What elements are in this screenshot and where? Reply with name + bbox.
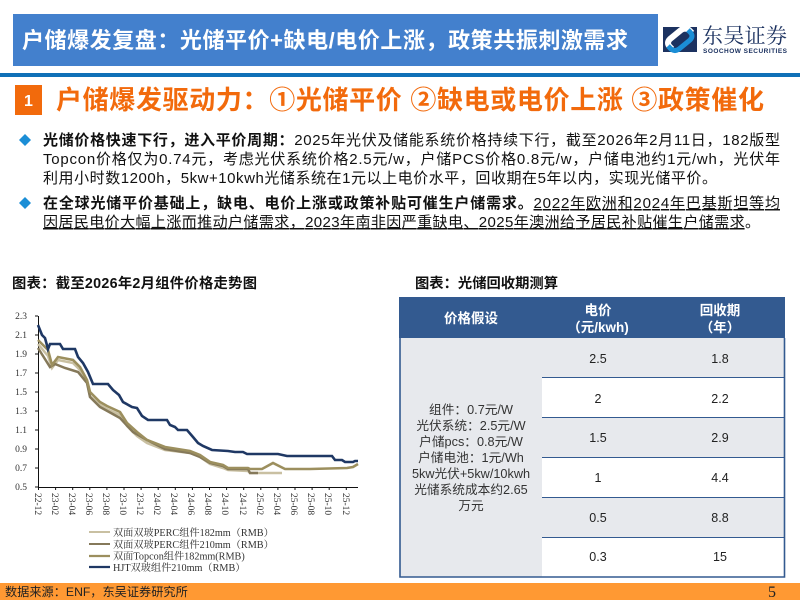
y axis labels: 1.3 bbox=[15, 407, 27, 417]
table header: 价格假设 bbox=[444, 310, 498, 326]
table values: 4.4 bbox=[711, 471, 729, 485]
x axis labels: 23-08 bbox=[100, 493, 110, 515]
logo: Soochow Securities bbox=[663, 20, 788, 55]
assumptions cell: 户储电池：1元/Wh bbox=[418, 450, 524, 465]
x axis labels: 25-04 bbox=[271, 493, 281, 515]
table values: 8.8 bbox=[711, 511, 729, 525]
bullet paragraph: demand catalysts: 因居民电价大幅上涨而推动户储需求，2023年南非因严重缺电、2025年澳洲给予居民补贴催生户储需求。 bbox=[43, 214, 760, 231]
y axis labels: 1.9 bbox=[15, 350, 27, 360]
series: HJT 210mm bbox=[38, 325, 358, 462]
icon: bullet diamond 1 bbox=[19, 134, 31, 146]
table values: 15 bbox=[713, 550, 727, 564]
legend: 双面Topcon组件182mm(RMB) bbox=[113, 550, 245, 562]
table values: 1.8 bbox=[711, 352, 729, 366]
table header: （元/kwh) bbox=[567, 320, 629, 335]
table header: （年） bbox=[700, 319, 740, 335]
x axis labels: 25-12 bbox=[340, 493, 350, 515]
assumptions cell: 光储系统成本约2.65 bbox=[414, 483, 528, 497]
footer bar: 数据来源：ENF，东吴证券研究所 bbox=[5, 584, 188, 599]
legend: 双面双玻PERC组件210mm（RMB） bbox=[113, 538, 274, 551]
assumptions cell: 5kw光伏+5kw/10kwh bbox=[412, 467, 530, 481]
assumptions cell bbox=[412, 403, 530, 513]
x axis labels: 24-10 bbox=[219, 493, 229, 515]
table header: 电价 bbox=[584, 303, 612, 318]
x axis labels: 25-08 bbox=[305, 493, 315, 515]
legend bbox=[89, 526, 274, 574]
x axis labels: 25-10 bbox=[322, 493, 332, 515]
y axis labels: 0.5 bbox=[15, 483, 27, 493]
chart title: module price: 图表：截至2026年2月组件价格走势图 bbox=[12, 274, 257, 292]
table body bbox=[400, 338, 542, 577]
table values bbox=[589, 352, 729, 564]
x axis labels: 22-12 bbox=[32, 493, 42, 515]
assumptions cell: 户储pcs：0.8元/W bbox=[419, 434, 523, 449]
footer bar bbox=[0, 583, 800, 600]
table values: 2.9 bbox=[711, 431, 729, 445]
logo: Soochow Securities: SOOCHOW SECURITIES bbox=[703, 48, 788, 55]
x axis labels: 23-06 bbox=[83, 493, 93, 515]
logo: Soochow Securities: 东吴证券 bbox=[702, 20, 787, 50]
series: PERC 210mm bbox=[38, 348, 258, 473]
bullet paragraph: demand catalysts: 在全球光储平价基础上，缺电、电价上涨或政策补贴可催生户储需求。2022年欧洲和2024年巴基斯坦等均 bbox=[43, 194, 780, 212]
x axis labels: 24-02 bbox=[151, 493, 161, 515]
table header: 回收期 bbox=[700, 303, 740, 318]
section heading: 户储爆发驱动力：①光储平价 ②缺电或电价上涨 ③政策催化 bbox=[56, 85, 764, 115]
x axis labels: 25-06 bbox=[288, 493, 298, 515]
y axis labels: 1.5 bbox=[15, 388, 27, 398]
x axis labels: 24-06 bbox=[185, 493, 195, 515]
table header bbox=[399, 297, 785, 338]
header banner bbox=[13, 14, 658, 66]
table values: 2.5 bbox=[589, 352, 607, 366]
table values: 2 bbox=[595, 392, 602, 406]
table values: 0.5 bbox=[589, 511, 607, 525]
assumptions cell: 组件：0.7元/W bbox=[429, 403, 513, 417]
section heading: 1 bbox=[24, 93, 33, 110]
y axis labels: 1.1 bbox=[15, 426, 27, 436]
table values: 0.3 bbox=[589, 550, 607, 564]
legend: 双面双玻PERC组件182mm（RMB） bbox=[113, 526, 274, 539]
y axis labels: 2.3 bbox=[15, 312, 27, 322]
x axis labels: 23-12 bbox=[134, 493, 144, 515]
y axis labels: 0.9 bbox=[15, 445, 27, 455]
bullet paragraph: price decline: 利用小时数1200h，5kw+10kwh光储系统在1元以上电价水平，回收期在5年以内，实现光储平价。 bbox=[43, 170, 717, 187]
y axis labels: 0.7 bbox=[15, 464, 27, 474]
x axis labels: 25-02 bbox=[254, 493, 264, 515]
header banner: 户储爆发复盘：光储平价+缺电/电价上涨，政策共振刺激需求 bbox=[22, 28, 628, 53]
x axis labels: 23-10 bbox=[117, 493, 127, 515]
series: PERC 182mm bbox=[38, 344, 282, 473]
x axis labels: 24-08 bbox=[202, 493, 212, 515]
x axis labels: 24-04 bbox=[168, 493, 178, 515]
table values: 1 bbox=[595, 471, 602, 485]
icon: bullet diamond 2 bbox=[19, 197, 31, 209]
x axis labels: 23-02 bbox=[49, 493, 59, 515]
bullet paragraph: price decline: 光储价格快速下行，进入平价周期：2025年光伏及储能系统价格持续下行，截至2026年2月11日，182版型 bbox=[43, 131, 780, 149]
table values: 2.2 bbox=[711, 392, 729, 406]
assumptions cell: 光伏系统：2.5元/W bbox=[416, 419, 526, 433]
y axis labels: 1.7 bbox=[15, 369, 27, 379]
y axis labels bbox=[15, 312, 27, 493]
table: payback period bbox=[399, 297, 785, 577]
y axis labels: 2.1 bbox=[15, 331, 27, 341]
x axis labels bbox=[32, 493, 350, 515]
chart title: payback: 图表：光储回收期测算 bbox=[415, 274, 558, 292]
bullet paragraph: price decline: Topcon价格仅为0.74元，考虑光伏系统价格2.5元/w，户储PCS价格0.8元/w，户储电池约1元/wh，光伏年 bbox=[43, 151, 780, 168]
table values: 1.5 bbox=[589, 431, 607, 445]
top divider stripe bbox=[0, 73, 800, 77]
x axis labels: 24-12 bbox=[237, 493, 247, 515]
x axis labels: 23-04 bbox=[66, 493, 76, 515]
line chart: module prices bbox=[15, 312, 358, 574]
bullet paragraph: demand catalysts bbox=[19, 194, 780, 231]
bullet paragraph: price decline bbox=[19, 131, 780, 187]
assumptions cell: 万元 bbox=[458, 499, 484, 513]
legend: HJT双玻组件210mm（RMB） bbox=[113, 561, 245, 574]
series: Topcon 182mm bbox=[38, 340, 358, 469]
